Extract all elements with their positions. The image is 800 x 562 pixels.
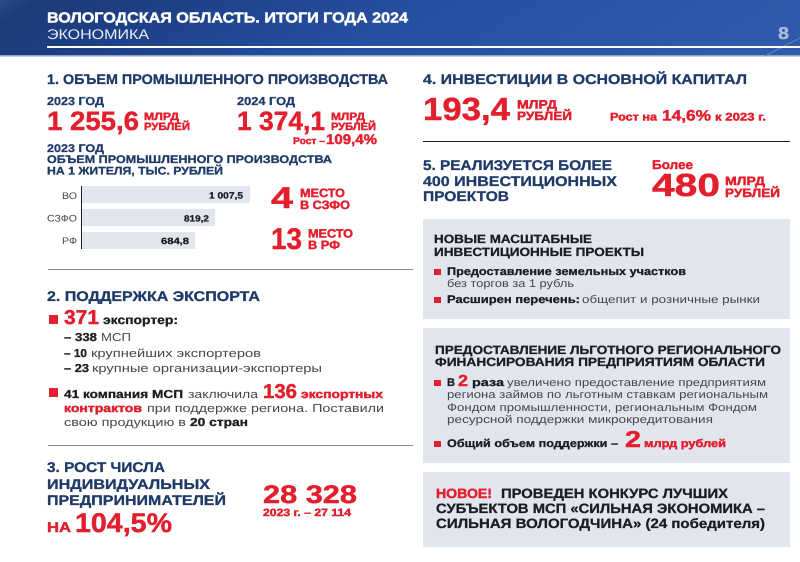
section 3 heading: 3. РОСТ ЧИСЛА <box>47 459 165 475</box>
rank 4 in SZFO: В СЗФО <box>300 198 350 212</box>
expanded list item <box>434 294 760 306</box>
export contracts text: 136 <box>263 381 297 403</box>
projects value: МЛРД <box>725 174 766 188</box>
land plots item <box>434 266 686 290</box>
loans item <box>434 373 768 426</box>
export contracts text: контрактов <box>64 403 142 415</box>
growth percentage: 104,5% <box>75 508 172 538</box>
header title: ВОЛОГОДСКАЯ ОБЛАСТЬ. ИТОГИ ГОДА 2024 <box>47 10 408 26</box>
exporters list: – 338 <box>64 332 98 344</box>
2024 value: 1 374,1 <box>237 106 325 136</box>
per capita subheading <box>47 143 332 178</box>
panel: SME contest: ПРОВЕДЕН КОНКУРС ЛУЧШИХ <box>501 486 728 501</box>
entrepreneurs count: 2023 г. – 27 114 <box>263 507 351 519</box>
exporters list: – 10 <box>64 348 87 360</box>
2024 value <box>237 96 378 147</box>
exporters list: экспортер: <box>103 313 178 327</box>
section 3 heading: ИНДИВИДУАЛЬНЫХ <box>47 476 211 492</box>
rank 13 in RF: 13 <box>271 223 302 256</box>
section 1 heading: 1. ОБЪЕМ ПРОМЫШЛЕННОГО ПРОИЗВОДСТВА <box>47 71 388 87</box>
section 3: entrepreneurs growth <box>47 459 357 538</box>
panel: SME contest: СИЛЬНАЯ ВОЛОГОДЧИНА» (24 победителя) <box>436 516 765 531</box>
section 2: export support <box>47 288 384 429</box>
investment growth: к 2023 г. <box>715 112 766 124</box>
land plots item: Предоставление земельных участков <box>447 266 686 278</box>
projects value: 480 <box>652 167 720 203</box>
section 5 heading <box>423 157 618 204</box>
section 5 heading: ПРОЕКТОВ <box>423 188 509 204</box>
rank 13 in RF: В РФ <box>308 238 340 252</box>
exporters list: МСП <box>101 332 131 344</box>
exporters list: крупные организации-экспортеры <box>92 363 322 375</box>
export contracts text: свою продукцию в <box>64 417 186 429</box>
panel title <box>435 343 781 369</box>
export contracts text: экспортных <box>301 389 384 401</box>
exporters list: – 23 <box>64 363 89 375</box>
growth percentage: НА <box>47 519 71 535</box>
2023 value: 2023 ГОД <box>47 96 104 108</box>
exporters list: крупнейших экспортеров <box>91 348 261 360</box>
section 3 heading: ПРЕДПРИНИМАТЕЛЕЙ <box>47 492 226 508</box>
projects value <box>652 158 780 203</box>
panel title: ФИНАНСИРОВАНИЯ ПРЕДПРИЯТИЯМ ОБЛАСТИ <box>435 355 765 369</box>
rank 4 in SZFO: 4 <box>271 182 293 215</box>
panel: SME contest <box>423 472 790 547</box>
projects value: РУБЛЕЙ <box>725 186 780 200</box>
2024 value: 2024 ГОД <box>237 96 295 108</box>
export contracts text: 41 компания МСП <box>64 389 183 401</box>
bar chart: 819,2 <box>184 214 209 224</box>
section 5 heading: 5. РЕАЛИЗУЕТСЯ БОЛЕЕ <box>423 157 612 173</box>
investment value <box>423 91 572 127</box>
panel title: ИНВЕСТИЦИОННЫЕ ПРОЕКТЫ <box>434 245 644 259</box>
rank 13 in RF <box>271 223 353 256</box>
2024 value: Рост – <box>293 136 325 147</box>
panel title: НОВЫЕ МАСШТАБНЫЕ <box>434 232 592 246</box>
total support item <box>434 426 726 452</box>
per capita subheading: НА 1 ЖИТЕЛЯ, ТЫС. РУБЛЕЙ <box>47 164 223 178</box>
section 3 heading <box>47 459 226 508</box>
bar chart: СЗФО <box>47 214 77 224</box>
2024 value: РУБЛЕЙ <box>331 120 376 133</box>
section 4 heading: 4. ИНВЕСТИЦИИ В ОСНОВНОЙ КАПИТАЛ <box>423 71 747 87</box>
panel: SME contest: СУБЪЕКТОВ МСП «СИЛЬНАЯ ЭКОНОМИКА – <box>436 501 766 516</box>
export contracts text: заключила <box>188 389 259 401</box>
loans item: В <box>447 377 455 389</box>
2024 value: 109,4% <box>326 131 378 147</box>
investment growth <box>610 108 766 124</box>
per capita subheading: ОБЪЕМ ПРОМЫШЛЕННОГО ПРОИЗВОДСТВА <box>47 154 332 166</box>
header subtitle: ЭКОНОМИКА <box>47 26 150 42</box>
panel: new investment projects <box>423 219 790 319</box>
2024 value: МЛРД <box>331 111 366 123</box>
bar chart: 1 007,5 <box>209 190 243 200</box>
loans item: Фондом промышленности, региональным Фондом <box>447 402 757 414</box>
loans item: увеличено предоставление предприятиям <box>507 377 766 389</box>
entrepreneurs count <box>263 481 357 519</box>
bar chart: 684,8 <box>161 236 189 246</box>
rank 13 in RF: МЕСТО <box>308 226 353 240</box>
loans item: региона займов по льготным ставкам региональным <box>447 389 768 401</box>
section 1: industrial production <box>47 71 388 256</box>
panel: preferential financing <box>423 328 790 463</box>
bar chart: ВО <box>62 191 77 202</box>
per capita subheading: 2023 ГОД <box>47 143 104 155</box>
investment value: МЛРД <box>517 98 558 112</box>
total support item: Общий объем поддержки – <box>447 438 618 450</box>
projects value: Более <box>652 158 693 172</box>
panel title <box>434 232 644 259</box>
export contracts text <box>49 381 384 429</box>
total support item: 2 <box>625 426 641 452</box>
loans item: 2 <box>458 373 468 390</box>
investment value: 193,4 <box>423 91 510 127</box>
investment growth: Рост на <box>610 112 658 124</box>
panel title: ПРЕДОСТАВЛЕНИЕ ЛЬГОТНОГО РЕГИОНАЛЬНОГО <box>435 343 781 357</box>
section 2 heading: 2. ПОДДЕРЖКА ЭКСПОРТА <box>47 288 260 304</box>
bar chart: РФ <box>62 236 77 247</box>
2023 value <box>47 96 190 136</box>
entrepreneurs count: 28 328 <box>263 481 357 509</box>
exporters list <box>49 307 322 375</box>
panel: SME contest: НОВОЕ! <box>436 486 492 501</box>
section 4: fixed capital investment <box>423 71 766 127</box>
investment value: РУБЛЕЙ <box>517 109 572 123</box>
exporters list: 371 <box>64 307 99 329</box>
2023 value: МЛРД <box>144 111 180 123</box>
rank 4 in SZFO: МЕСТО <box>300 186 345 200</box>
2023 value: РУБЛЕЙ <box>144 120 190 133</box>
investment growth: 14,6% <box>662 108 711 124</box>
total support item: млрд рублей <box>644 438 726 450</box>
header banner <box>0 0 800 56</box>
expanded list item: общепит и розничные рынки <box>582 294 760 306</box>
expanded list item: Расширен перечень: <box>447 294 580 306</box>
export contracts text: 20 стран <box>190 417 248 429</box>
section 5 heading: 400 ИНВЕСТИЦИОННЫХ <box>423 173 618 189</box>
bar chart <box>47 186 250 249</box>
land plots item: без торгов за 1 рубль <box>447 278 574 290</box>
rank 4 in SZFO <box>271 182 350 215</box>
page number: 8 <box>778 24 789 43</box>
loans item: раза <box>472 377 505 389</box>
section 5: investment projects <box>423 157 780 204</box>
loans item: ресурсной поддержки микрокредитования <box>447 414 713 426</box>
2023 value: 1 255,6 <box>47 106 139 136</box>
export contracts text: при поддержке региона. Поставили <box>147 403 384 415</box>
